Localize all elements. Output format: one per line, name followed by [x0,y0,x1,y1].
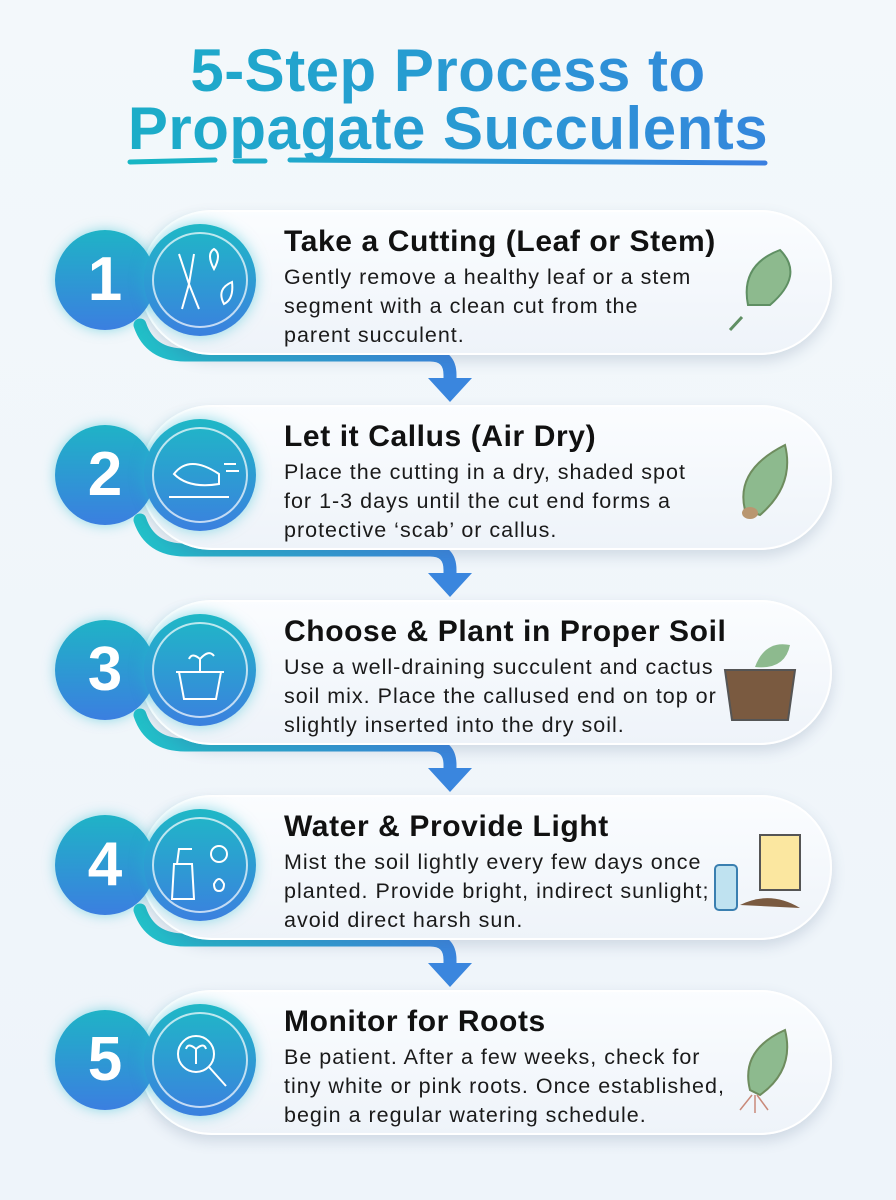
title underline [128,158,768,166]
step 1: Gently remove a healthy leaf or a stem [284,265,691,289]
image: callused leaf [742,444,788,519]
step 3: slightly inserted into the dry soil. [284,713,625,737]
image: spray bottle & window [714,834,801,911]
step 4: planted. Provide bright, indirect sunlight; [284,879,709,903]
number 2 [55,425,155,525]
image: pot with soil [724,644,796,721]
step 1: segment with a clean cut from the [284,294,638,318]
title [0,42,896,158]
number 3: 3 [88,635,122,704]
step 4 [140,795,832,940]
step 3: Use a well-draining succulent and cactus [284,655,714,679]
step 4: Mist the soil lightly every few days once [284,850,701,874]
step 1 [140,210,832,355]
number 5 [55,1010,155,1110]
number 3 [55,620,155,720]
step 2: protective ‘scab’ or callus. [284,518,557,542]
step 1: Take a Cutting (Leaf or Stem) [284,225,716,258]
step 5: Be patient. After a few weeks, check for [284,1045,700,1069]
step 3 [140,600,832,745]
number 4: 4 [88,830,122,899]
step 5: Monitor for Roots [284,1005,546,1038]
title: 5-Step Process to [190,37,706,104]
icon: pot [144,614,256,726]
step 2: Let it Callus (Air Dry) [284,420,596,453]
step 2 [140,405,832,550]
number 5: 5 [88,1025,122,1094]
title: Propagate Succulents [128,95,768,162]
step 4: Water & Provide Light [284,810,609,843]
step 2: for 1-3 days until the cut end forms a [284,489,671,513]
step 1: parent succulent. [284,323,465,347]
icon: drying leaf [144,419,256,531]
step 3: Choose & Plant in Proper Soil [284,615,726,648]
step 5: begin a regular watering schedule. [284,1103,647,1127]
step 4: avoid direct harsh sun. [284,908,523,932]
step 3: soil mix. Place the callused end on top or [284,684,717,708]
icon: pruners [144,224,256,336]
number 2: 2 [88,440,122,509]
number 4 [55,815,155,915]
number 1 [55,230,155,330]
icon: magnifier with sprout [144,1004,256,1116]
step 5 [140,990,832,1135]
icon: spray and sun [144,809,256,921]
step 5: tiny white or pink roots. Once established, [284,1074,725,1098]
image: leaf [729,248,792,331]
image: leaf with roots [740,1028,788,1113]
step 2: Place the cutting in a dry, shaded spot [284,460,686,484]
number 1: 1 [88,245,122,314]
